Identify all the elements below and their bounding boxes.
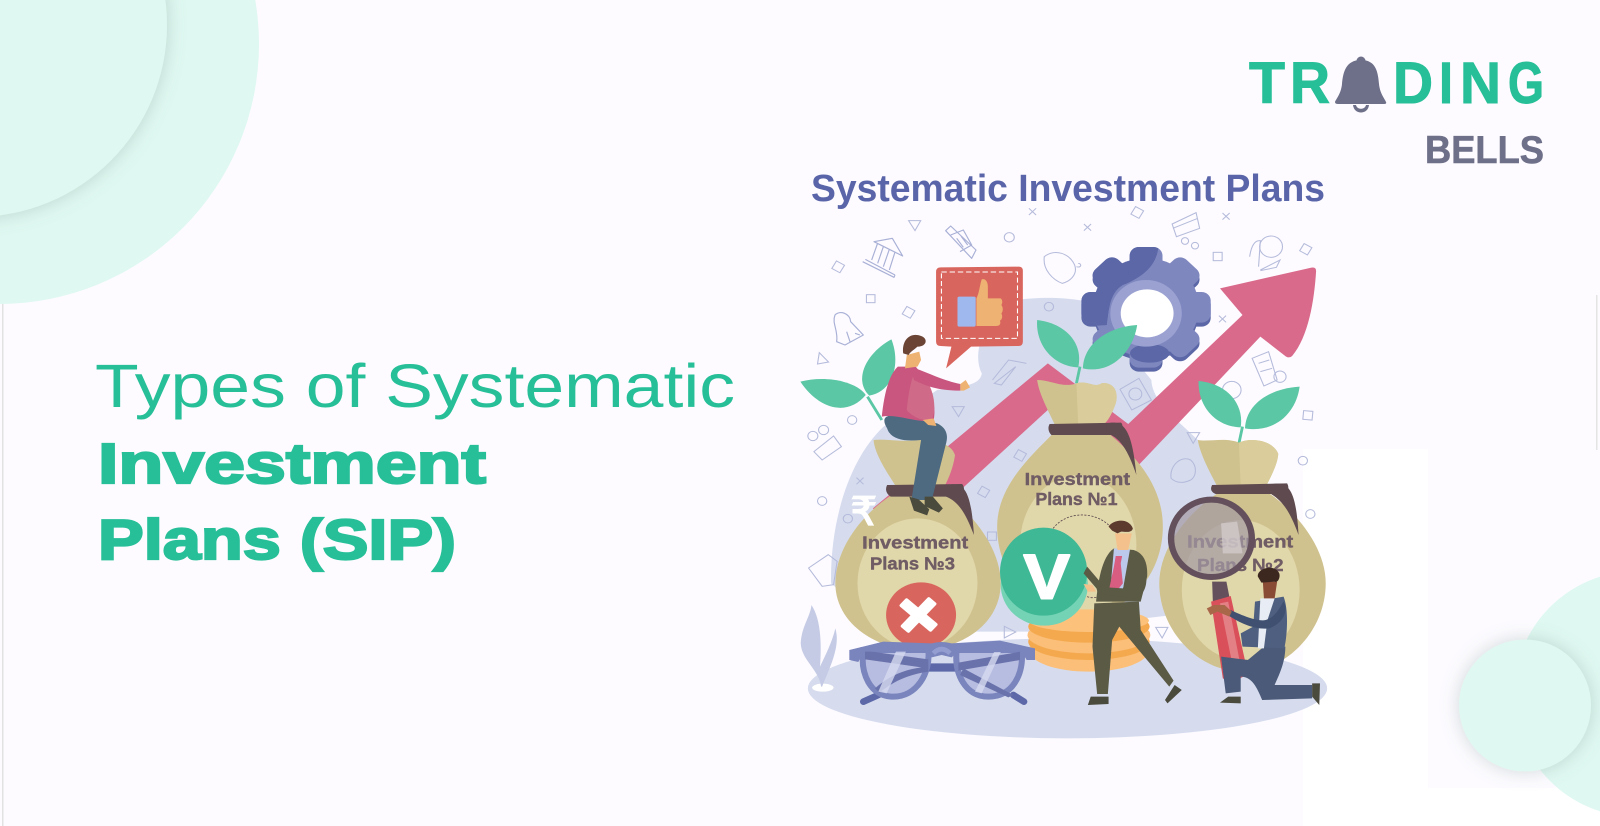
logo: Trading Bells: I bbox=[1439, 51, 1453, 116]
backdrop blob bbox=[831, 298, 1221, 632]
right edge line bbox=[1596, 295, 1598, 450]
kneeling man bbox=[1207, 568, 1320, 705]
decorative circles: bottom right bbox=[1459, 571, 1600, 817]
money bag: plan 2: Investment bbox=[1187, 531, 1293, 551]
doodle icons: bank, card terminal, person bbox=[834, 226, 976, 345]
speech bubble with thumbs up bbox=[936, 267, 1023, 368]
logo: Trading Bells: N bbox=[1460, 51, 1501, 116]
main heading: Types of Systematic bbox=[95, 352, 735, 420]
ground ellipse bbox=[808, 638, 1327, 738]
illustration title: Systematic Investment Plans bbox=[811, 168, 1325, 210]
reject badge bbox=[886, 582, 956, 648]
magnifying glass bbox=[1171, 500, 1252, 680]
plant on left bag bbox=[800, 339, 895, 420]
logo: Trading Bells: D bbox=[1393, 51, 1433, 116]
green V coin bbox=[1000, 528, 1088, 626]
growth arrow bbox=[873, 267, 1316, 513]
logo: Trading Bells: BELLS bbox=[1425, 129, 1544, 172]
main heading bbox=[95, 352, 735, 572]
left edge line bbox=[2, 0, 4, 826]
illustration: systematic investment plans bbox=[800, 207, 1327, 738]
doodle icons bbox=[808, 207, 1315, 638]
logo: Trading Bells: R bbox=[1290, 51, 1330, 116]
plant on right bag bbox=[1199, 381, 1300, 443]
logo: Trading Bells: G bbox=[1508, 51, 1544, 116]
stack of coins bbox=[1027, 609, 1150, 672]
gear bbox=[1081, 247, 1211, 372]
money bag: plan 2 bbox=[1159, 440, 1326, 672]
businessman bbox=[1084, 521, 1182, 705]
money bag: plan 1 bbox=[997, 380, 1163, 615]
main heading: Investment bbox=[98, 432, 486, 496]
lighter strip beside illustration bbox=[1303, 449, 1600, 826]
logo: Trading Bells bbox=[1249, 51, 1544, 172]
money bag: plan 3: Investment bbox=[862, 532, 968, 552]
money bag: plan 2: Plans №2 bbox=[1197, 555, 1284, 575]
logo: Trading Bells: T bbox=[1249, 51, 1285, 116]
money bag: plan 1: Plans №1 bbox=[1035, 489, 1117, 509]
money bag: plan 3 bbox=[835, 440, 1001, 650]
decorative circles: top left bbox=[0, 0, 259, 304]
pale plant bbox=[801, 605, 837, 692]
main heading: Plans (SIP) bbox=[98, 508, 456, 572]
green V coin: V bbox=[1024, 541, 1070, 612]
seated man bbox=[882, 335, 970, 515]
money bag: plan 1: Investment bbox=[1025, 469, 1130, 489]
dashed arc bbox=[1053, 515, 1110, 598]
plant on centre bag bbox=[1037, 320, 1137, 383]
money bag: plan 3: Plans №3 bbox=[870, 553, 955, 573]
eyeglasses bbox=[849, 641, 1035, 702]
rupee symbol: ₹ bbox=[850, 489, 877, 534]
icon: bell bbox=[1335, 56, 1386, 112]
